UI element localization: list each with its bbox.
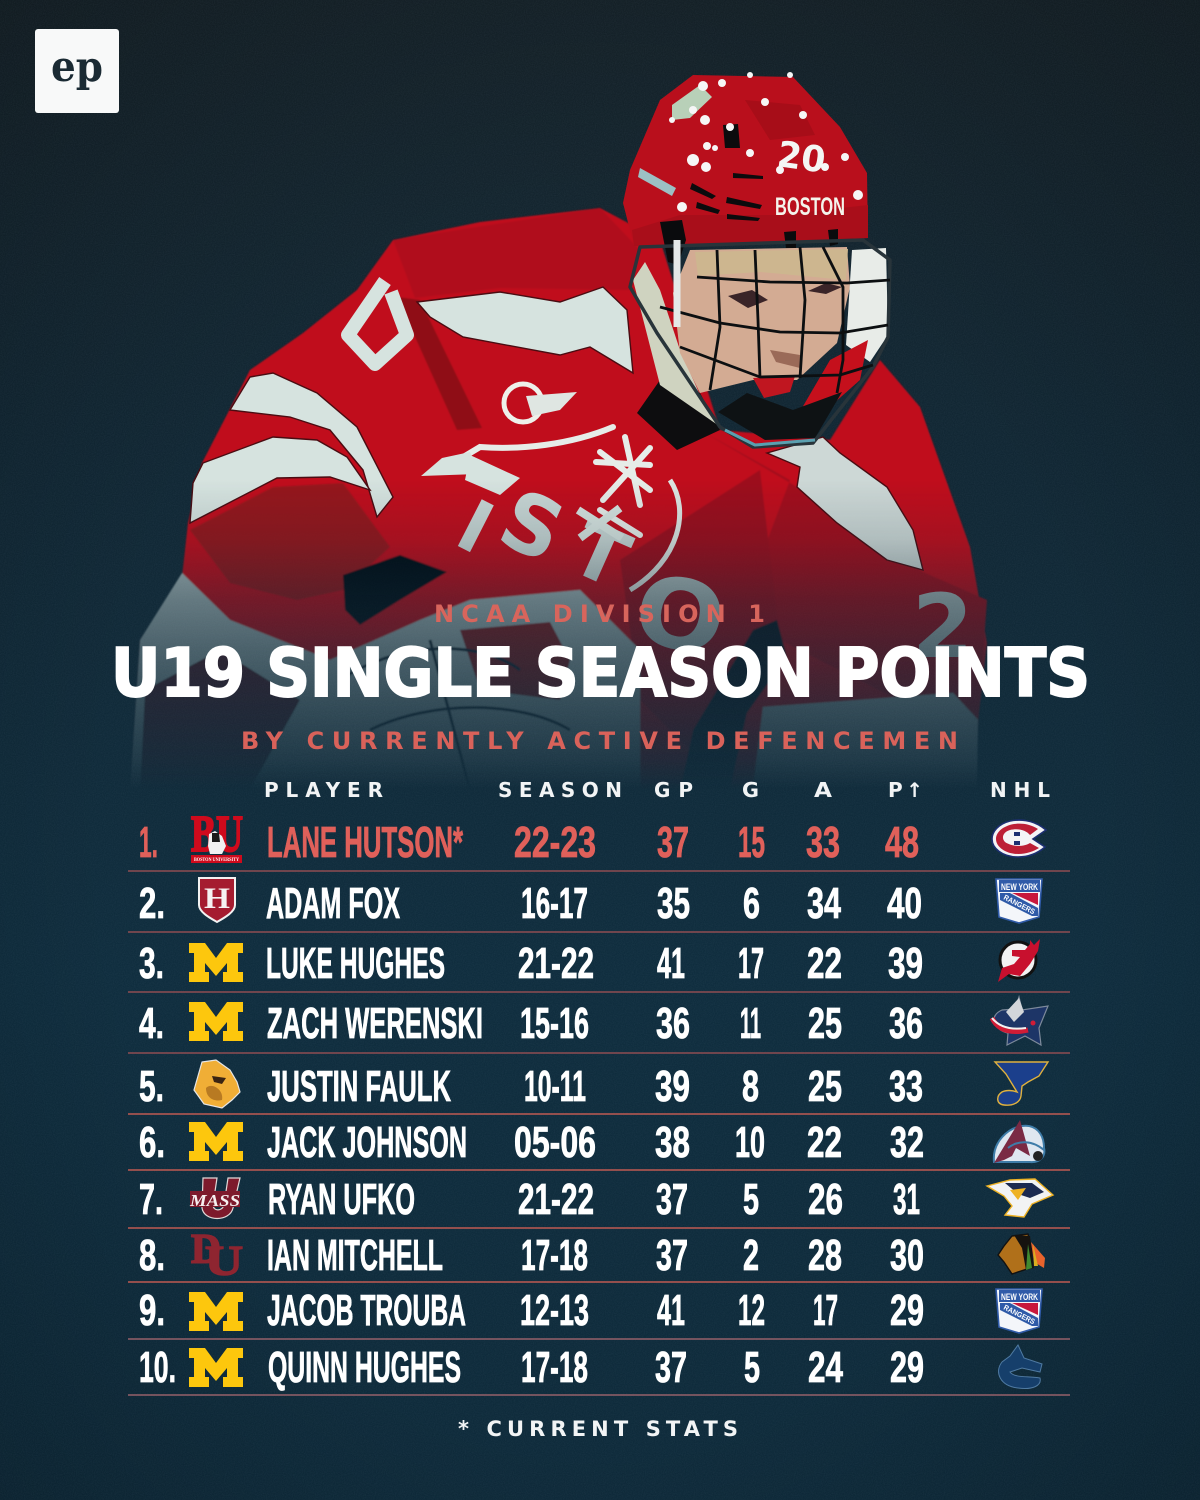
logo: Denver xyxy=(191,1227,243,1285)
row 2: Adam Fox: 34 xyxy=(807,879,841,928)
row 2: Adam Fox: 2. xyxy=(139,879,165,928)
logo: Rangers: NEW YORK xyxy=(1001,1292,1038,1302)
table header: GP xyxy=(654,778,693,802)
logo: Canadiens xyxy=(992,820,1046,857)
row 4: Zach Werenski: 36 xyxy=(656,999,690,1048)
row 7: Ryan Ufko: 7. xyxy=(139,1175,163,1224)
row 1: Lane Hutson: LANE HUTSON* xyxy=(267,818,464,867)
jersey crest and lettering: T xyxy=(559,503,642,606)
row 3: Luke Hughes: 22 xyxy=(807,939,842,988)
logo: Blues xyxy=(995,1062,1048,1105)
jersey crest and lettering: I xyxy=(444,483,506,570)
table xyxy=(128,818,1070,1395)
chin cup xyxy=(718,392,842,440)
row 6: Jack Johnson: 32 xyxy=(890,1118,924,1167)
logo: Minnesota Duluth bulldog xyxy=(194,1060,240,1108)
row 1: Lane Hutson: 15 xyxy=(738,818,765,867)
logo: Rangers xyxy=(996,1289,1042,1333)
row 6: Jack Johnson: JACK JOHNSON xyxy=(267,1118,467,1167)
row 3: Luke Hughes: 21-22 xyxy=(518,939,594,988)
logo: Rangers: RANGERS xyxy=(1002,1303,1036,1326)
row 8: Ian Mitchell: IAN MITCHELL xyxy=(267,1231,443,1280)
row 9: Jacob Trouba: 9. xyxy=(139,1286,165,1335)
logo: Michigan xyxy=(189,1002,243,1041)
jersey stripes xyxy=(190,287,923,570)
row 1: Lane Hutson: 22-23 xyxy=(514,818,596,867)
footnote: * CURRENT STATS xyxy=(458,1417,738,1441)
player body xyxy=(130,208,987,790)
row 8: Ian Mitchell: 8. xyxy=(139,1231,165,1280)
row 4: Zach Werenski: 11 xyxy=(740,999,761,1048)
row 6: Jack Johnson: 22 xyxy=(807,1118,842,1167)
row 7: Ryan Ufko xyxy=(139,1175,920,1224)
logo: Blackhawks xyxy=(998,1234,1045,1274)
row 1: Lane Hutson: 33 xyxy=(806,818,840,867)
row 8: Ian Mitchell xyxy=(139,1231,924,1280)
helmet xyxy=(623,72,868,265)
logo: Michigan xyxy=(189,943,243,982)
table header: P↑ xyxy=(888,778,923,802)
row 8: Ian Mitchell: 37 xyxy=(656,1231,688,1280)
row dividers xyxy=(128,871,1070,1395)
jersey crest and lettering xyxy=(421,384,973,678)
row 2: Adam Fox: 16-17 xyxy=(521,879,588,928)
logo: Blue Jackets xyxy=(992,997,1048,1045)
row 7: Ryan Ufko: 31 xyxy=(893,1175,920,1224)
table header: G xyxy=(742,778,759,802)
logo: UMass: MASS xyxy=(189,1191,240,1210)
neck guard xyxy=(633,262,722,428)
row 3: Luke Hughes xyxy=(139,939,923,988)
row 4: Zach Werenski xyxy=(139,999,923,1048)
gloves and sleeves xyxy=(130,573,640,790)
row 5: Justin Faulk xyxy=(139,1062,923,1111)
helmet vents xyxy=(690,124,763,221)
row 7: Ryan Ufko: RYAN UFKO xyxy=(268,1175,415,1224)
logo: Canucks xyxy=(999,1345,1042,1389)
row 4: Zach Werenski: 4. xyxy=(139,999,164,1048)
row 1: Lane Hutson: 48 xyxy=(885,818,919,867)
face cage xyxy=(630,240,890,447)
row 10: Quinn Hughes: 29 xyxy=(890,1343,924,1392)
row 7: Ryan Ufko: 5 xyxy=(743,1175,759,1224)
row 3: Luke Hughes: 41 xyxy=(657,939,685,988)
shoulder number xyxy=(348,281,407,364)
row 9: Jacob Trouba xyxy=(139,1286,924,1335)
row 8: Ian Mitchell: 17-18 xyxy=(521,1231,588,1280)
helmet decal xyxy=(672,85,712,120)
logo: Predators xyxy=(987,1179,1053,1217)
logo: Boston University: BOSTON UNIVERSITY xyxy=(194,857,239,863)
ep logo xyxy=(35,29,119,113)
logo: UMass xyxy=(189,1178,240,1218)
row 10: Quinn Hughes: 17-18 xyxy=(521,1343,588,1392)
row 8: Ian Mitchell: 30 xyxy=(890,1231,924,1280)
row 4: Zach Werenski: 15-16 xyxy=(520,999,589,1048)
helmet clips xyxy=(660,220,838,265)
row 10: Quinn Hughes: 5 xyxy=(744,1343,760,1392)
row 9: Jacob Trouba: 29 xyxy=(890,1286,924,1335)
neck shadow xyxy=(637,380,720,450)
logo: Denver: D xyxy=(191,1227,221,1273)
row 3: Luke Hughes: 39 xyxy=(888,939,923,988)
helmet: BOSTON xyxy=(775,193,845,221)
table header: SEASON xyxy=(498,778,622,802)
row 7: Ryan Ufko: 26 xyxy=(808,1175,843,1224)
row 6: Jack Johnson: 05-06 xyxy=(514,1118,596,1167)
row 10: Quinn Hughes: QUINN HUGHES xyxy=(268,1343,461,1392)
table header xyxy=(264,778,1050,802)
ep logo: ep xyxy=(51,42,103,91)
cage post xyxy=(674,240,680,327)
row 3: Luke Hughes: LUKE HUGHES xyxy=(266,939,445,988)
row 7: Ryan Ufko: 37 xyxy=(656,1175,688,1224)
row 10: Quinn Hughes: 10. xyxy=(139,1343,176,1392)
logo: Denver: U xyxy=(205,1239,243,1285)
logo: Devils xyxy=(998,939,1040,982)
row 6: Jack Johnson: 38 xyxy=(655,1118,690,1167)
logo: Michigan xyxy=(189,1292,243,1331)
logo: Michigan xyxy=(189,1122,243,1161)
logo: Rangers: RANGERS xyxy=(1002,893,1036,916)
row 9: Jacob Trouba: 41 xyxy=(657,1286,685,1335)
player photo xyxy=(130,72,987,790)
row 6: Jack Johnson: 10 xyxy=(735,1118,765,1167)
row 5: Justin Faulk: 10-11 xyxy=(524,1062,586,1111)
row 2: Adam Fox: 40 xyxy=(887,879,922,928)
row 4: Zach Werenski: ZACH WERENSKI xyxy=(267,999,483,1048)
row 2: Adam Fox xyxy=(139,879,922,928)
face xyxy=(673,247,850,393)
row 10: Quinn Hughes: 24 xyxy=(808,1343,843,1392)
row 10: Quinn Hughes: 37 xyxy=(655,1343,687,1392)
jersey crest and lettering: S xyxy=(486,471,577,582)
row 5: Justin Faulk: 5. xyxy=(139,1062,164,1111)
row 5: Justin Faulk: 25 xyxy=(808,1062,842,1111)
row 9: Jacob Trouba: JACOB TROUBA xyxy=(267,1286,466,1335)
lower arm xyxy=(190,483,390,600)
helmet specks xyxy=(669,72,863,212)
row 3: Luke Hughes: 3. xyxy=(139,939,164,988)
row 5: Justin Faulk: 8 xyxy=(742,1062,759,1111)
row 1: Lane Hutson xyxy=(139,818,919,867)
subtitle: BY CURRENTLY ACTIVE DEFENCEMEN xyxy=(241,727,958,755)
college logos xyxy=(189,806,243,1387)
row 2: Adam Fox: ADAM FOX xyxy=(266,879,400,928)
logo: Rangers xyxy=(996,879,1042,923)
right helmet padding xyxy=(846,248,888,362)
row 8: Ian Mitchell: 28 xyxy=(808,1231,842,1280)
nose shadow xyxy=(770,350,800,368)
row 5: Justin Faulk: 39 xyxy=(655,1062,690,1111)
row 9: Jacob Trouba: 17 xyxy=(813,1286,838,1335)
table header: NHL xyxy=(990,778,1050,802)
row 5: Justin Faulk: 33 xyxy=(889,1062,923,1111)
logo: Harvard xyxy=(199,878,235,922)
row 9: Jacob Trouba: 12-13 xyxy=(520,1286,589,1335)
lips xyxy=(753,376,795,398)
jersey crest and lettering: 2 xyxy=(912,575,973,678)
helmet: 20 xyxy=(775,134,828,182)
row 4: Zach Werenski: 25 xyxy=(808,999,842,1048)
row 1: Lane Hutson: 37 xyxy=(657,818,689,867)
logo: Rangers: NEW YORK xyxy=(1001,882,1038,892)
jersey crest and lettering: O xyxy=(626,552,734,678)
logo: Michigan xyxy=(189,1348,243,1387)
row 1: Lane Hutson: 1. xyxy=(139,818,158,867)
logo: Harvard: H xyxy=(204,882,230,915)
row 3: Luke Hughes: 17 xyxy=(738,939,764,988)
row 6: Jack Johnson: 6. xyxy=(139,1118,165,1167)
eyes xyxy=(728,283,842,308)
row 4: Zach Werenski: 36 xyxy=(889,999,923,1048)
kicker: NCAA Division 1: NCAA DIVISION 1 xyxy=(434,600,765,628)
row 6: Jack Johnson xyxy=(139,1118,924,1167)
row 8: Ian Mitchell: 2 xyxy=(743,1231,759,1280)
table header: A xyxy=(814,778,833,802)
row 2: Adam Fox: 35 xyxy=(657,879,690,928)
NHL logos xyxy=(987,820,1053,1389)
row 9: Jacob Trouba: 12 xyxy=(738,1286,765,1335)
forehead xyxy=(695,249,848,280)
row 2: Adam Fox: 6 xyxy=(743,879,760,928)
logo: Avalanche xyxy=(994,1120,1044,1163)
table header: PLAYER xyxy=(264,778,383,802)
row 7: Ryan Ufko: 21-22 xyxy=(518,1175,594,1224)
row 5: Justin Faulk: JUSTIN FAULK xyxy=(267,1062,451,1111)
logo: Boston University: BU xyxy=(191,806,243,863)
row 10: Quinn Hughes xyxy=(139,1343,924,1392)
main title: U19 SINGLE SEASON POINTS xyxy=(111,634,1090,712)
